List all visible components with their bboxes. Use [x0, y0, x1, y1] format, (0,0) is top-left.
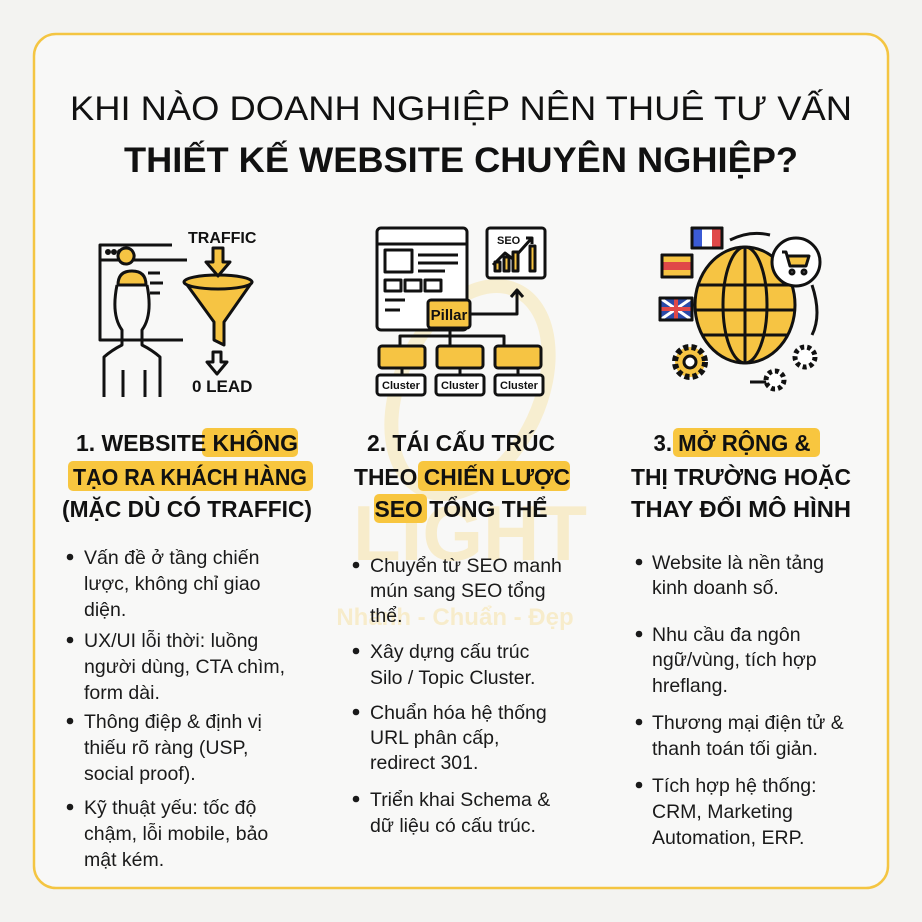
bullets col3: hreflang. — [652, 675, 728, 697]
text: Pillar — [431, 307, 468, 324]
bullets col2 — [353, 555, 562, 837]
text: Cluster — [500, 380, 539, 392]
bullets col1 — [67, 547, 285, 871]
bullets col1: lược, không chỉ giao — [84, 573, 261, 595]
text: SEO — [497, 235, 521, 247]
bullets col1: diện. — [84, 599, 126, 621]
watermark: Nhanh - Chuẩn - Đẹp — [336, 604, 574, 631]
bullets col3: Automation, ERP. — [652, 827, 804, 849]
bullets col3: Thương mại điện tử & — [652, 712, 844, 734]
bullets col3 — [636, 552, 844, 849]
bullets col2: Triển khai Schema & — [370, 789, 550, 811]
bullets col2: thể. — [370, 605, 403, 627]
headings — [62, 428, 851, 522]
title: THIẾT KẾ WEBSITE CHUYÊN NGHIỆP? — [124, 140, 798, 180]
bullets col3: thanh toán tối giản. — [652, 738, 818, 760]
heading highlights — [68, 428, 820, 523]
headings: 1. WEBSITE KHÔNG — [76, 429, 298, 456]
bullets col1: Kỹ thuật yếu: tốc độ — [84, 797, 257, 819]
bullets col2: Chuẩn hóa hệ thống — [370, 702, 547, 724]
bullets col1: chậm, lỗi mobile, bảo — [84, 822, 268, 845]
headings: THEO CHIẾN LƯỢC — [354, 463, 570, 490]
headings: THAY ĐỔI MÔ HÌNH — [631, 495, 851, 522]
bullets col2: Chuyển từ SEO manh — [370, 555, 562, 577]
bullets col3: Website là nền tảng — [652, 552, 824, 574]
headings: THỊ TRƯỜNG HOẶC — [631, 463, 851, 490]
watermark — [336, 261, 587, 631]
bullets col2: Xây dựng cấu trúc — [370, 641, 530, 663]
bullets col1: Vấn đề ở tầng chiến — [84, 547, 259, 569]
bullets col3: CRM, Marketing — [652, 801, 793, 823]
bullets col3: kinh doanh số. — [652, 577, 779, 599]
bullets col3: Nhu cầu đa ngôn — [652, 624, 801, 646]
bullets col2: redirect 301. — [370, 752, 478, 774]
bullets col3: ngữ/vùng, tích hợp — [652, 649, 817, 671]
text: 0 LEAD — [192, 377, 252, 396]
icon: global expansion — [660, 228, 820, 389]
text: Cluster — [382, 380, 421, 392]
bullets col1: người dùng, CTA chìm, — [84, 656, 285, 678]
bullets col2: dữ liệu có cấu trúc. — [370, 815, 536, 837]
bullets col1: social proof). — [84, 763, 196, 785]
icon: traffic funnel — [100, 245, 252, 397]
headings: 3. MỞ RỘNG & — [654, 428, 810, 456]
bullets col1: mật kém. — [84, 849, 164, 871]
bullets col1: UX/UI lỗi thời: luồng — [84, 629, 258, 652]
bullets col2: URL phân cấp, — [370, 727, 499, 749]
headings: 2. TÁI CẤU TRÚC — [367, 429, 555, 456]
headings: (MẶC DÙ CÓ TRAFFIC) — [62, 495, 312, 522]
watermark: LIGHT — [353, 489, 587, 577]
headings: TẠO RA KHÁCH HÀNG — [73, 463, 307, 490]
bullets col1: Thông điệp & định vị — [84, 711, 262, 733]
text: Cluster — [441, 380, 480, 392]
bullets col1: thiếu rõ ràng (USP, — [84, 737, 248, 759]
bullets col2: mún sang SEO tổng — [370, 580, 546, 602]
title: KHI NÀO DOANH NGHIỆP NÊN THUÊ TƯ VẤN — [70, 90, 852, 128]
headings: SEO TỔNG THỂ — [374, 495, 548, 522]
bullets col2: Silo / Topic Cluster. — [370, 667, 535, 689]
bullets col3: Tích hợp hệ thống: — [652, 775, 817, 797]
bullets col1: form dài. — [84, 682, 160, 704]
icon: pillar cluster — [377, 228, 545, 395]
text: TRAFFIC — [188, 230, 257, 247]
title — [70, 90, 852, 180]
